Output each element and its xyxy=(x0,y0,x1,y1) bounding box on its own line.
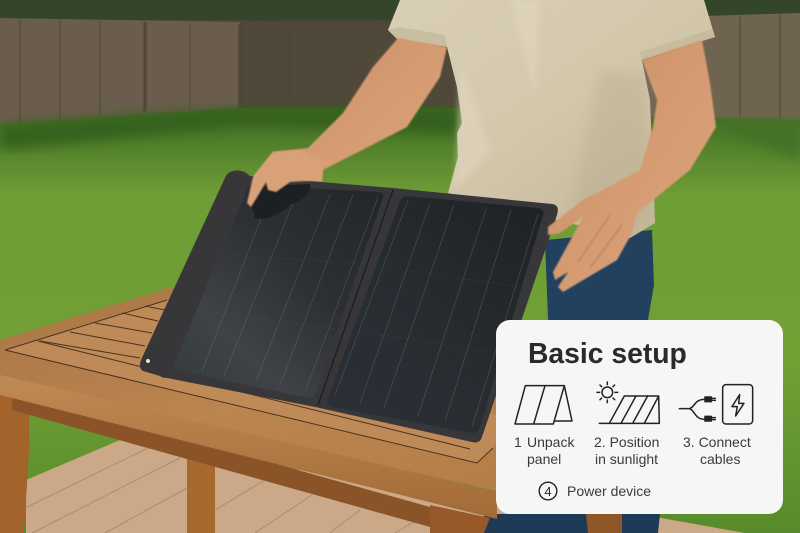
panel: hand shadow xyxy=(250,184,310,219)
instruction card xyxy=(496,320,783,514)
step 1 label: panel xyxy=(527,451,561,467)
step 1 label: 1 xyxy=(514,434,522,450)
panel: eyelet xyxy=(145,358,151,364)
panel: left cell xyxy=(174,185,384,398)
person: t-shirt xyxy=(388,0,715,238)
person: jeans xyxy=(545,230,654,320)
step 3 label: 3. Connect xyxy=(683,434,751,450)
panel: outer fabric xyxy=(140,171,558,442)
icon: unfolded panel xyxy=(515,386,572,424)
person: jeans below card xyxy=(484,514,660,533)
icon: cables and device xyxy=(679,385,753,424)
step 3 label: cables xyxy=(700,451,740,467)
step 2 label xyxy=(594,434,659,467)
panel: hinge xyxy=(318,190,393,405)
card background xyxy=(496,320,783,514)
step 1 label xyxy=(514,434,575,467)
panel: right cell xyxy=(327,196,543,433)
table: apron xyxy=(12,390,430,527)
step 1 label: Unpack xyxy=(527,434,575,450)
step 4 badge xyxy=(539,482,557,500)
table: far right leg xyxy=(586,514,622,533)
step 4 label: Power device xyxy=(567,483,651,499)
step 2 label: 2. Position xyxy=(594,434,659,450)
step 2 label: in sunlight xyxy=(595,451,658,467)
step 3 label xyxy=(683,434,751,467)
heading: Basic setup xyxy=(528,337,687,369)
person: left fingers xyxy=(247,150,322,207)
solar panel xyxy=(140,171,558,442)
table: left leg xyxy=(0,388,29,533)
icon: panel in sunlight xyxy=(597,382,659,423)
deck boards xyxy=(25,440,745,533)
table: front edge xyxy=(0,375,497,519)
table top xyxy=(0,287,560,492)
table: right leg xyxy=(430,505,490,533)
person: right arm and hand xyxy=(548,40,716,292)
table: middle leg xyxy=(187,458,215,533)
person: left arm and hand xyxy=(247,38,447,206)
step 4 badge: 4 xyxy=(544,484,552,499)
